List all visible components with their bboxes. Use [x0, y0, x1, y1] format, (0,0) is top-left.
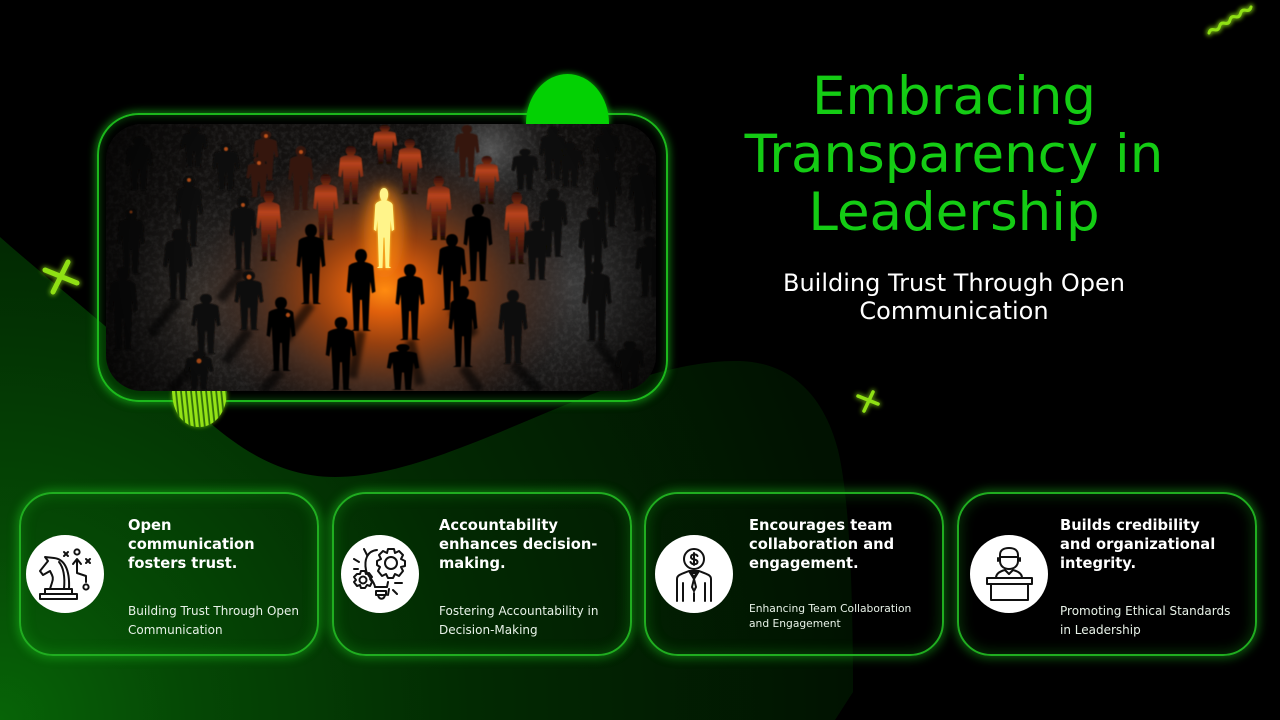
title: Transparency in — [745, 124, 1163, 185]
card 1 text: Communication — [128, 622, 223, 636]
card 1 frame — [19, 492, 319, 656]
card 4 text: in Leadership — [1060, 622, 1141, 636]
title — [744, 66, 1163, 243]
icon: lightbulb with gears — [341, 535, 419, 613]
foreground silhouettes — [267, 204, 492, 390]
card 2 text: Decision-Making — [439, 622, 538, 636]
floor — [106, 124, 656, 391]
card 4 frame — [957, 492, 1257, 656]
title: Embracing — [812, 66, 1096, 126]
card 3 text — [749, 602, 911, 630]
icon: businessman with dollar head — [655, 535, 733, 613]
top green semicircle — [526, 74, 609, 124]
photo: crowd around glowing figure — [106, 124, 656, 391]
card 2 text — [439, 604, 598, 636]
card 1 heading — [128, 516, 255, 572]
back row figures — [109, 127, 664, 390]
card 3 text: and Engagement — [749, 617, 841, 630]
card 3 heading: engagement. — [749, 554, 859, 572]
subtitle: Building Trust Through Open — [783, 269, 1125, 297]
card 3 text: Enhancing Team Collaboration — [749, 602, 911, 615]
central glowing figure — [364, 186, 404, 278]
card 3 heading — [749, 516, 894, 572]
card 3 frame — [644, 492, 944, 656]
card 4 text: Promoting Ethical Standards — [1060, 604, 1230, 618]
photo edge vignette — [106, 124, 656, 391]
card 2 heading — [439, 516, 597, 572]
card 4 heading: integrity. — [1060, 554, 1136, 572]
photo frame with glow — [97, 113, 668, 402]
icon: chess knight strategy — [26, 535, 104, 613]
card 4 text — [1060, 604, 1230, 636]
icon: speaker at podium — [970, 535, 1048, 613]
subtitle: Communication — [859, 297, 1049, 325]
title: Leadership — [808, 182, 1100, 243]
card 2 heading: Accountability — [439, 516, 558, 534]
card 1 heading: Open — [128, 516, 171, 534]
card 2 heading: making. — [439, 554, 506, 572]
card 1 text: Building Trust Through Open — [128, 604, 299, 618]
card 4 heading: Builds credibility — [1060, 516, 1200, 534]
card 2 text: Fostering Accountability in — [439, 604, 598, 618]
card 2 heading: enhances decision- — [439, 536, 597, 552]
card 4 heading — [1060, 516, 1215, 572]
glowing head highlights — [130, 134, 303, 364]
card 1 heading: communication — [128, 536, 255, 552]
card 1 text — [128, 604, 299, 636]
dim orange figures — [246, 125, 479, 210]
card 1 heading: fosters trust. — [128, 554, 237, 572]
orange lit figures — [256, 125, 529, 264]
card 4 heading: and organizational — [1060, 536, 1215, 552]
bottom striped semicircle — [169, 391, 230, 430]
subtitle — [783, 269, 1125, 325]
card 2 frame — [332, 492, 632, 656]
card 3 heading: collaboration and — [749, 536, 894, 552]
card 3 heading: Encourages team — [749, 516, 892, 534]
cast shadows — [150, 270, 625, 391]
